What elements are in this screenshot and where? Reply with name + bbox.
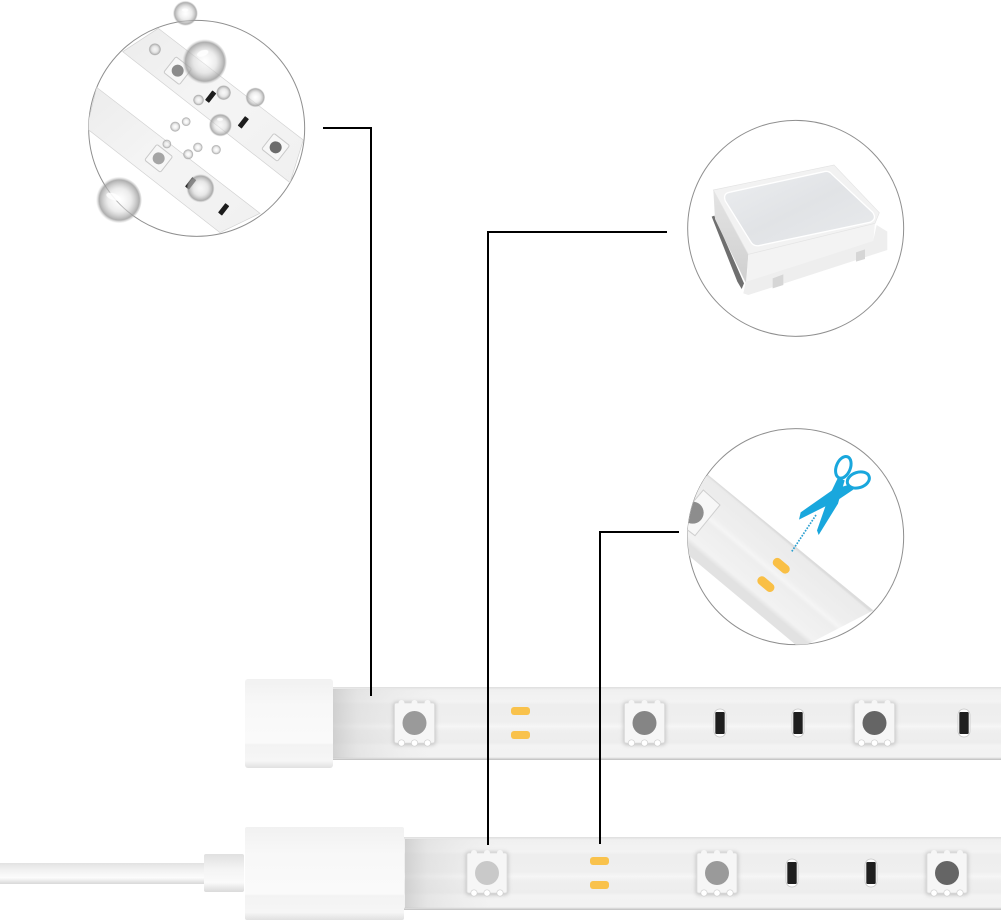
strip body [332, 687, 1001, 760]
resistor 4 [218, 203, 229, 216]
strip band [680, 475, 873, 648]
resistor 1 [205, 90, 216, 103]
upper strip band [123, 28, 303, 183]
LED 2 [624, 700, 666, 746]
LED 3 [926, 850, 968, 896]
connector line: cut mark callout to strip [600, 532, 679, 844]
circle background [688, 429, 904, 645]
resistor 3 [185, 177, 196, 190]
water droplets [95, 1, 265, 223]
resistor 3 [958, 709, 970, 737]
front wall [747, 222, 875, 282]
resistor 1 [786, 859, 798, 887]
top frame [713, 165, 879, 254]
LED body [688, 490, 720, 536]
circle background [89, 20, 305, 236]
scissors blade 1 [799, 485, 853, 520]
LED 3 [854, 700, 896, 746]
resistor 2 [792, 709, 804, 737]
resistor 2 [865, 859, 877, 887]
resistor 1 [714, 709, 726, 737]
cord collar [204, 854, 244, 892]
strip clipped to circle [677, 475, 873, 648]
translucent lens [725, 171, 874, 246]
shaded end of strip [333, 689, 433, 758]
resistor 2 [238, 116, 249, 129]
solder pads [511, 707, 530, 739]
metal contact side [712, 216, 744, 289]
left side wall [713, 190, 748, 283]
upper LED strip [245, 679, 1001, 768]
strip body [404, 837, 1001, 910]
lower strip band [87, 87, 260, 233]
solder pads [590, 857, 609, 889]
power cord [0, 863, 204, 884]
dotted cut line [792, 515, 816, 552]
scissors blade 2 [817, 478, 845, 535]
upper left LED [164, 57, 192, 85]
shaded end of strip [405, 839, 495, 908]
circle background [688, 120, 904, 336]
solder pad upper [771, 556, 792, 575]
connector line: waterproof callout to strip [323, 128, 371, 696]
droplet highlights [105, 8, 223, 202]
solder pad lower [756, 574, 776, 594]
scissors handle 1 [833, 454, 854, 480]
LED chip illustration [712, 165, 887, 295]
lower LED [145, 144, 173, 172]
LED 2 [696, 850, 738, 896]
right LED [262, 133, 290, 161]
panel: SMD LED chip close-up [688, 120, 904, 336]
panel: cut mark close-up [677, 429, 904, 648]
lower LED strip with cord [0, 827, 1001, 920]
scissors handle 2 [845, 469, 871, 491]
icon: scissors [799, 454, 871, 535]
LED 1 [466, 850, 508, 896]
lower base [743, 225, 887, 295]
end cap [245, 679, 333, 768]
connector line: LED chip callout to strip [488, 232, 667, 845]
wet strips clipped to circle [87, 28, 303, 233]
LED lens [688, 502, 704, 524]
partial LED [688, 490, 720, 536]
panel: waterproof strip close-up [87, 1, 305, 236]
end cap [245, 827, 404, 920]
LED 1 [394, 700, 436, 746]
base notches [773, 274, 783, 288]
